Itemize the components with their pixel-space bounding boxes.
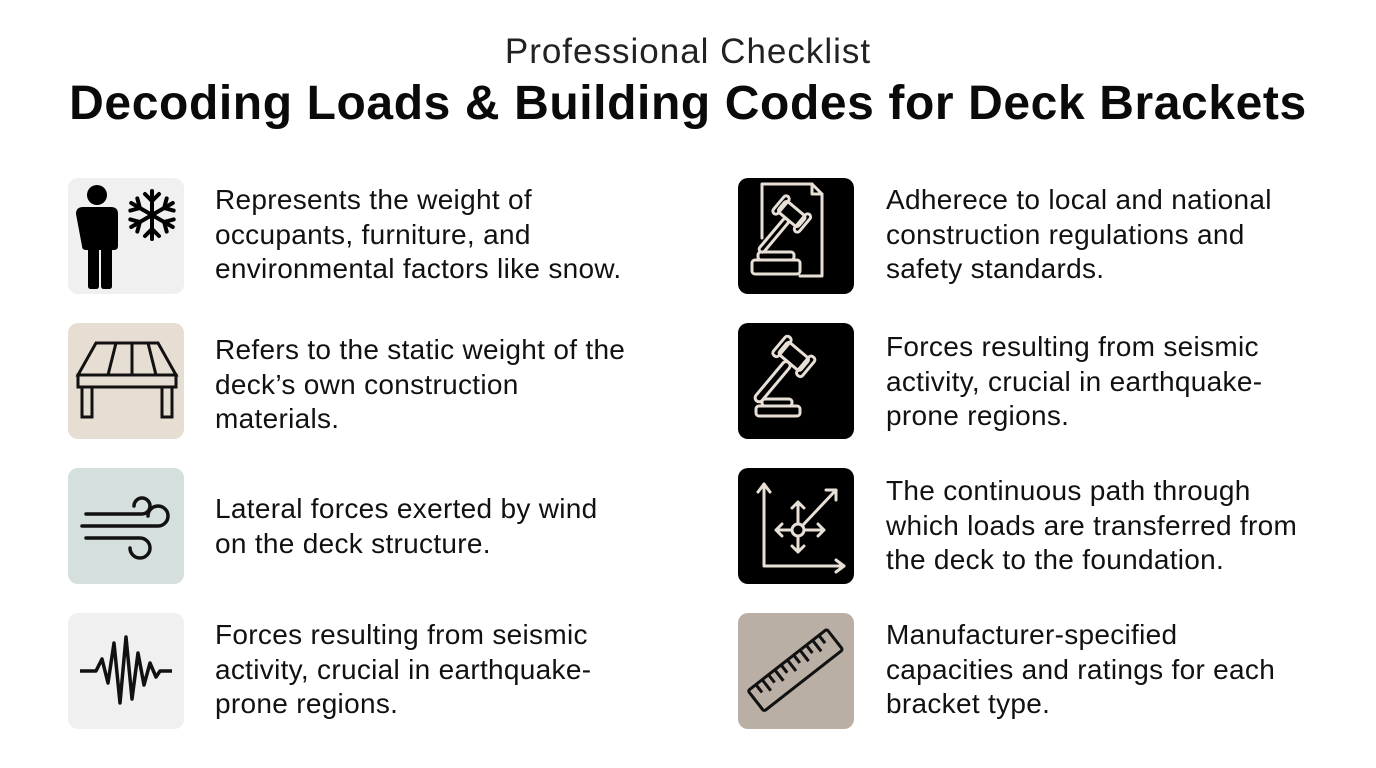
text: live load: occupants, furniture, and [215, 218, 531, 250]
text: seismic load: prone regions. [215, 688, 398, 719]
text: dead load: deck’s own construction [215, 368, 519, 400]
text: load path: The continuous path through [886, 475, 1251, 506]
text: seismic compliance: activity, crucial in earthquake- [886, 366, 1262, 396]
text: wind load: Lateral forces exerted by wind [215, 493, 598, 524]
text: manufacturer ratings: bracket type. [886, 688, 1050, 719]
text: wind load [215, 493, 598, 558]
text: manufacturer ratings [886, 619, 1275, 719]
icon: ruler [738, 613, 854, 729]
text: seismic load: Forces resulting from seismic [215, 619, 588, 650]
text: seismic compliance [886, 331, 1262, 431]
icon: load path arrows [738, 468, 854, 584]
text: building code: safety standards. [886, 253, 1104, 284]
text: dead load: Refers to the static weight of the [215, 334, 625, 365]
text: seismic load: activity, crucial in earthquake- [215, 654, 591, 684]
icon: seismic wave [68, 613, 184, 729]
text: manufacturer ratings: capacities and ratings for each [886, 654, 1275, 684]
text: wind load: on the deck structure. [215, 528, 491, 558]
text: seismic compliance: Forces resulting from seismic [886, 331, 1259, 362]
title: Decoding Loads & Building Codes for Deck Brackets [69, 77, 1307, 130]
text: seismic compliance: prone regions. [886, 400, 1069, 431]
text: live load: Represents the weight of [215, 184, 532, 215]
text: load path [886, 475, 1297, 575]
text: live load [215, 184, 621, 284]
icon: person and snowflake [68, 178, 184, 294]
text: building code: Adherece to local and national [886, 184, 1272, 215]
text: building code: construction regulations and [886, 218, 1245, 250]
text: building code [886, 184, 1272, 284]
icon: wind [68, 468, 184, 584]
icon: code document gavel [738, 178, 854, 294]
icon: deck table [68, 323, 184, 439]
text: dead load: materials. [215, 403, 339, 434]
text: live load: environmental factors like snow. [215, 253, 621, 284]
text: dead load [215, 334, 625, 434]
icon: gavel [738, 323, 854, 439]
text: load path: which loads are transferred from [886, 510, 1297, 540]
text: load path: the deck to the foundation. [886, 544, 1224, 575]
subtitle: Professional Checklist [505, 32, 871, 71]
text: manufacturer ratings: Manufacturer-specified [886, 619, 1177, 650]
text: seismic load [215, 619, 591, 719]
